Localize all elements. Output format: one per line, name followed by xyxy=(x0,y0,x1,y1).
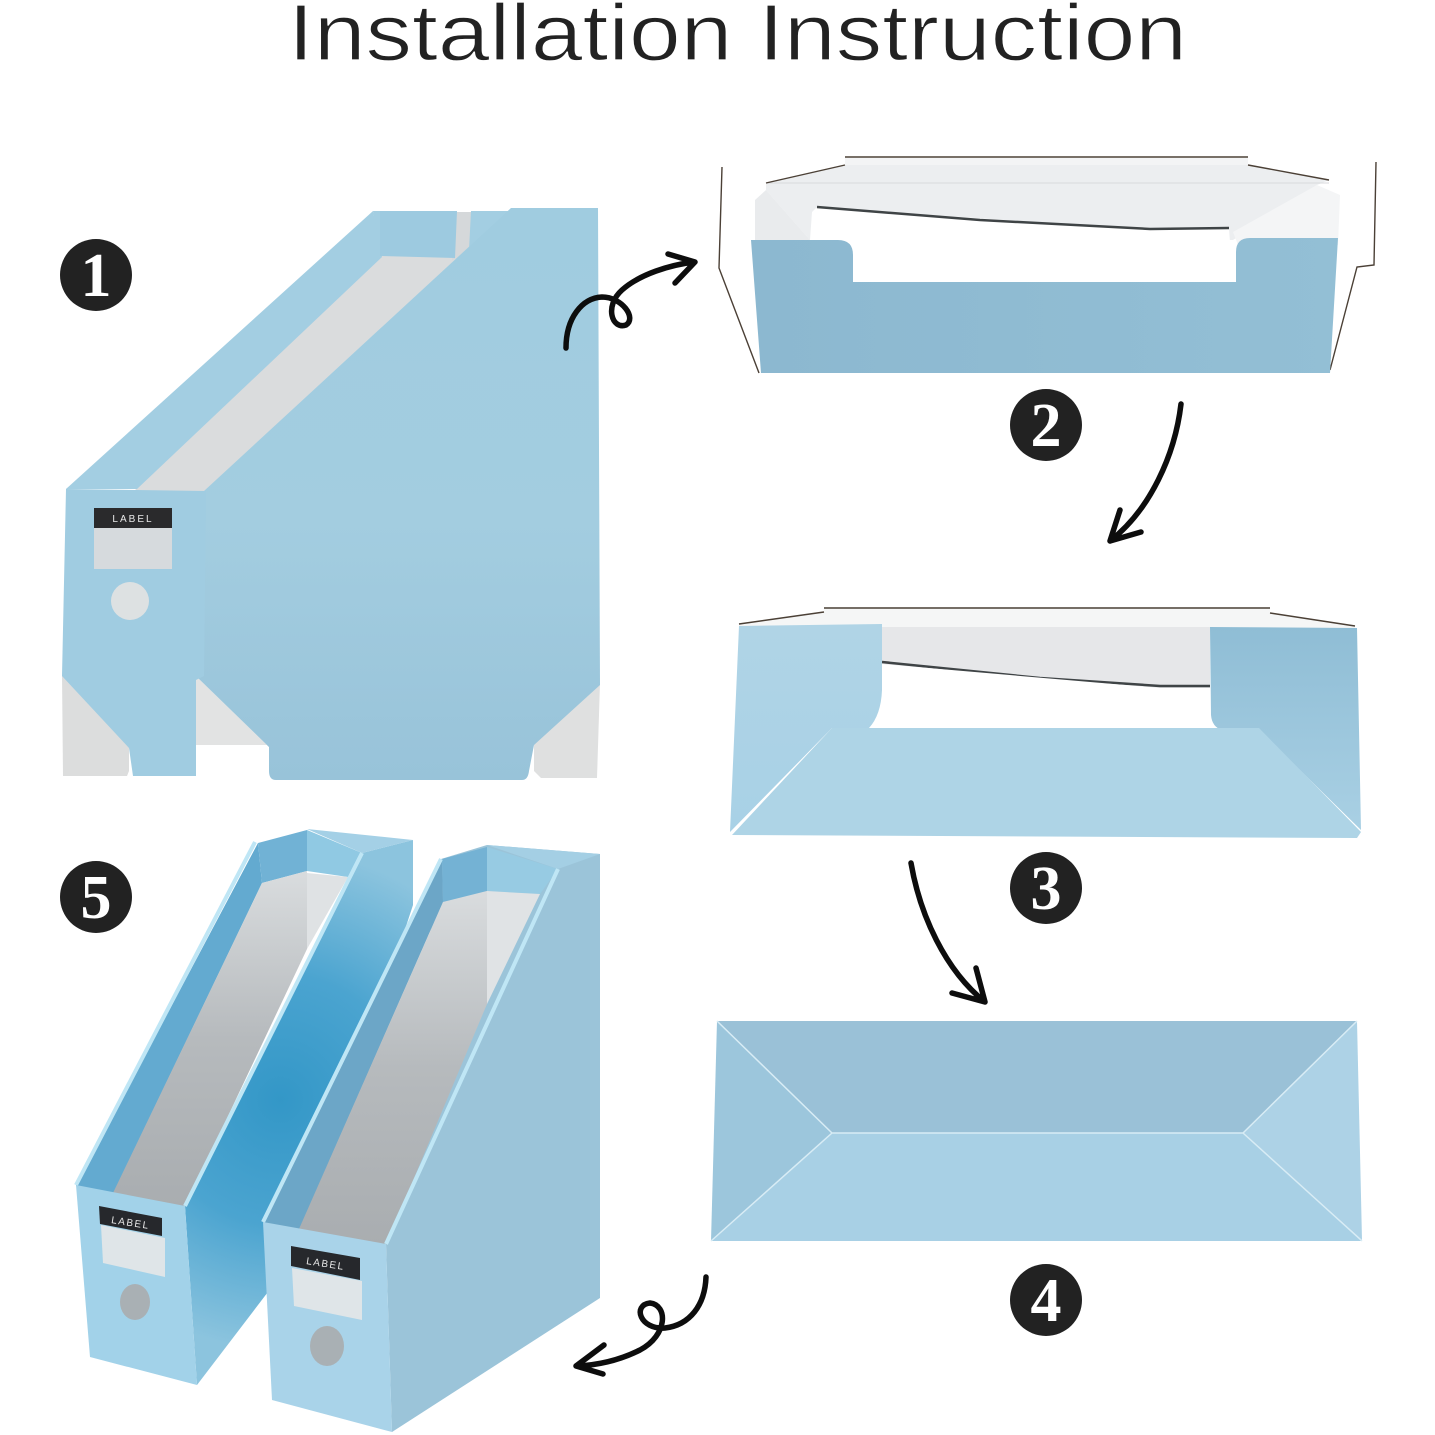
badge 2 xyxy=(1010,389,1082,461)
badge 4: 4 xyxy=(1030,1267,1062,1335)
badge 4 xyxy=(1010,1264,1082,1336)
step 1: flattened file box xyxy=(62,208,600,780)
label: LABEL xyxy=(305,1256,345,1273)
step 4: flat tray xyxy=(711,1021,1362,1241)
arrow 4 to 5 xyxy=(576,1277,706,1374)
label xyxy=(99,1206,165,1277)
step 3: folding tray xyxy=(730,607,1361,838)
step 2: unfolded tray xyxy=(719,157,1376,373)
back box xyxy=(76,829,413,1385)
hole xyxy=(111,582,149,620)
badge 3: 3 xyxy=(1030,855,1062,923)
step 5: two assembled file boxes xyxy=(76,829,600,1432)
badge 2: 2 xyxy=(1030,392,1062,460)
label: LABEL xyxy=(112,514,154,525)
hole xyxy=(120,1284,150,1320)
label xyxy=(94,508,172,569)
badge 5 xyxy=(60,861,132,933)
badge 1 xyxy=(60,239,132,311)
badge 1: 1 xyxy=(80,242,112,310)
arrow 1 to 2 xyxy=(566,254,695,348)
label: LABEL xyxy=(110,1215,150,1232)
label xyxy=(291,1246,362,1320)
badge 3 xyxy=(1010,852,1082,924)
front box xyxy=(263,845,600,1432)
badge 5: 5 xyxy=(80,864,112,932)
hole xyxy=(310,1326,344,1366)
arrow 3 to 4 xyxy=(911,863,985,1002)
arrow 2 to 3 xyxy=(1110,404,1181,541)
